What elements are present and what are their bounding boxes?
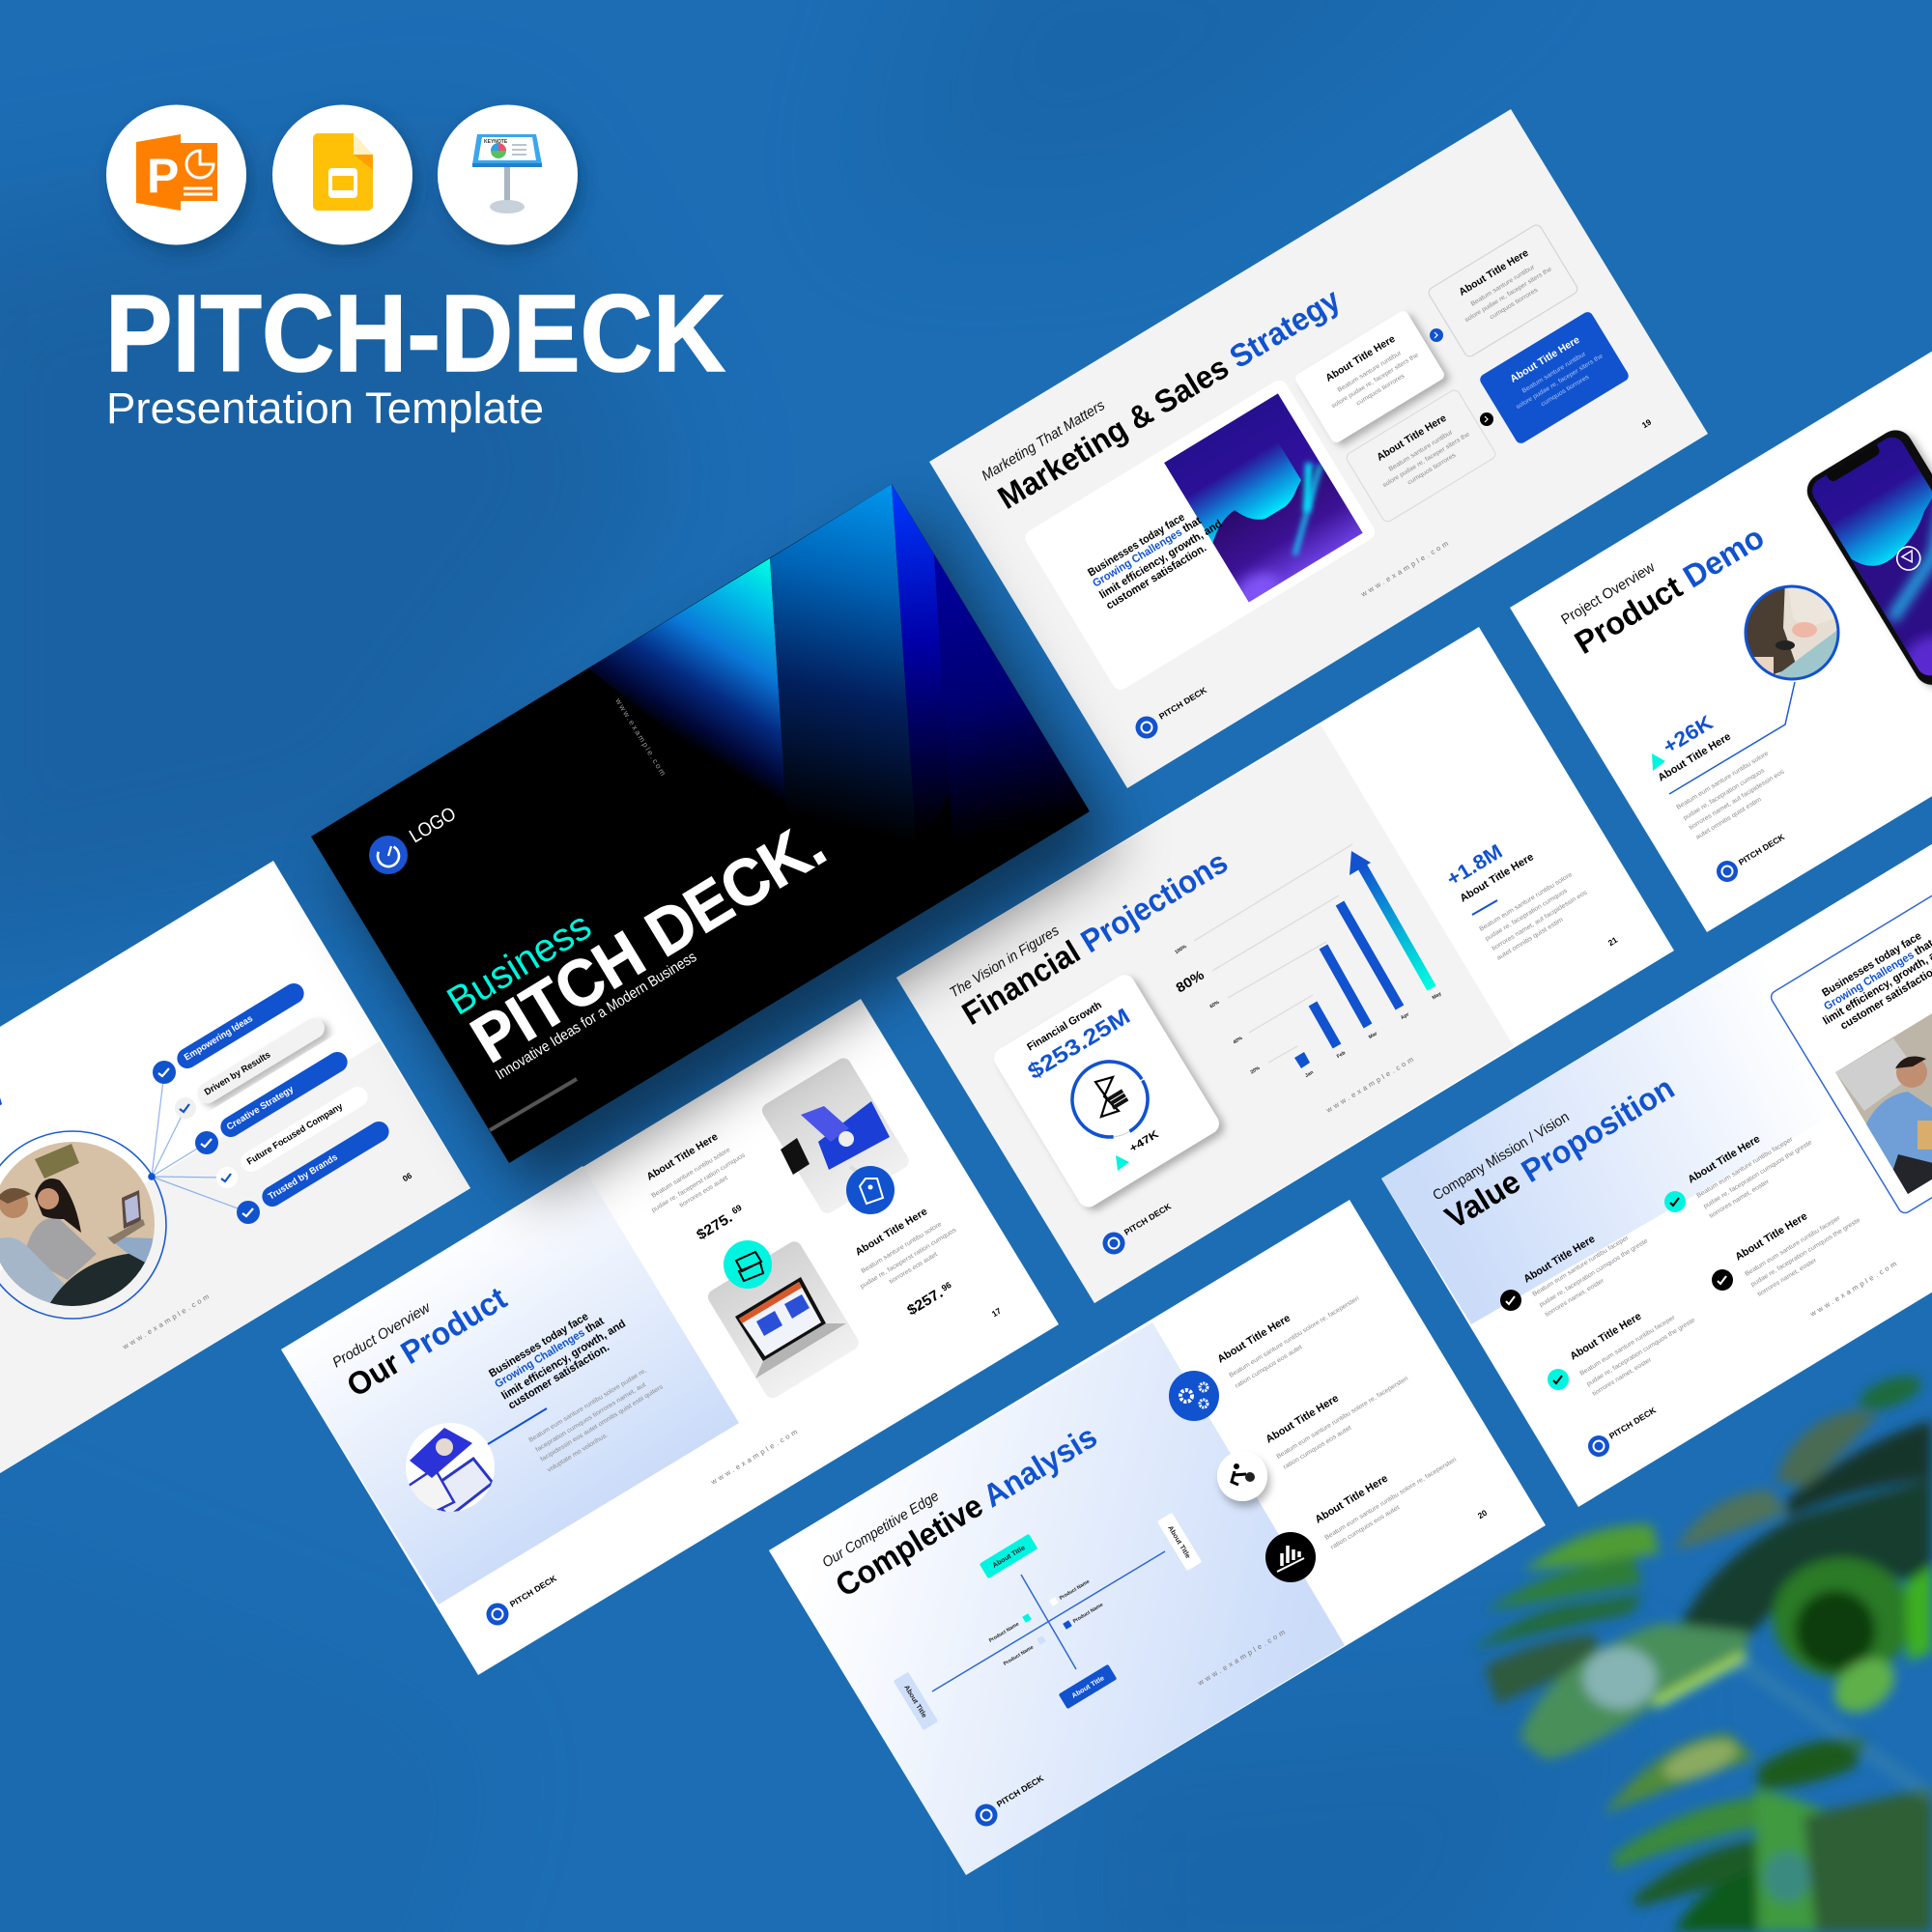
plant foreground [1471,1369,1932,1932]
icon: Keynote: KEYNOTE [484,139,508,145]
product 2 text: pudae re, faceperst ration cumquos [859,1227,958,1291]
item 4: About Title Here [1733,1210,1809,1264]
logo [1717,832,1787,882]
bar chart: Mar [1368,1031,1378,1040]
card: outlined upper: cumquos tiorrores [1489,286,1540,321]
pill: Driven by Results [193,1014,328,1107]
product 2 text: Beatum santure runtibu solore [860,1221,943,1275]
quadrant chart: Product Name [1003,1644,1035,1667]
card: outlined lower: cumquos tiorrores [1406,451,1458,486]
slide: cover [311,484,1090,1163]
slide: marketing and sales strategy [929,109,1708,788]
card: outlined upper: About Title Here [1457,247,1531,298]
pill: Trusted by Brands [258,1118,393,1210]
quadrant chart: Product Name [1059,1578,1091,1602]
subtitle: Presentation Template [106,384,544,433]
stat: +1.8M: +1.8M [1443,840,1506,891]
slide: our product [281,999,1059,1675]
stat: +26K: Beatum eum santure runtibu solore [1675,750,1770,811]
item 1: Beatum eum santure runtibu faceper [1531,1235,1631,1298]
heading: Marketing & Sales Strategy [991,281,1347,516]
bar chart: Feb [1336,1050,1347,1060]
slide: competitive analysis [769,1200,1546,1875]
product 1 text: Beatum santure runtibu solore [650,1147,732,1200]
logo: PITCH DECK [995,1773,1046,1809]
icon: bars [1265,1532,1316,1582]
icon: Keynote [438,104,578,245]
statement text: limit efficiency, growth, and [1097,518,1224,602]
tag: right: About Title [1166,1524,1191,1560]
growth card: Financial Growth [1025,999,1104,1054]
pill: Future Focused Company: Future Focused Company [245,1101,346,1168]
pill: Empowering Ideas [173,980,308,1072]
stat: +26K: About Title Here [1656,731,1733,784]
slide: competitive analysis: 20 [1476,1508,1489,1520]
image card: monitor mockup [759,1055,912,1216]
product 1 text: 69 [730,1203,744,1216]
card: outlined upper: solore pudae re, faceper siters the [1463,266,1553,324]
statement text: customer satisfaction. [1104,542,1208,612]
icon: PowerPoint [106,104,246,245]
icon: box [724,1240,772,1289]
card: outlined upper [1427,223,1579,358]
pill: Empowering Ideas: Empowering Ideas [183,1013,255,1064]
item 1: pudae re, facepration cumquos the greste [1538,1237,1649,1309]
logo [976,1773,1046,1826]
product 1 text: $275. [694,1209,735,1243]
statement text: customer satisfaction. [506,1342,611,1412]
bar chart: May [1432,991,1442,1001]
icon: Google Slides [272,104,412,245]
slide: left checklist [0,861,470,1540]
card: outlined lower: About Title Here [1375,412,1449,464]
quadrant chart: Product Name [988,1621,1020,1644]
outlined card with photo: Businesses today face [1820,930,1923,1000]
outlined card with photo [1770,895,1932,1213]
statement text: Growing Challenges that [1091,515,1204,590]
item 2: tiorrores namet, eoster [1591,1356,1654,1398]
item 3: Beatum eum santure runtibu solore re, facepersteri [1323,1456,1459,1542]
slide: financial projections: 21 [1606,935,1619,948]
item 1: About Title Here [1215,1313,1293,1366]
slide: financial projections: www.example.com [1324,1055,1415,1115]
check icons [153,1061,260,1224]
card: white: solore pudae re, faceper siters the [1330,352,1420,410]
cover slide shadow [337,518,1116,1197]
slide: marketing and sales strategy: www.example.com [1359,539,1450,599]
body text: Beatum eum santure runtibu solore pudae re, [527,1367,648,1444]
item 2: ration cumquos eos autet [1282,1425,1352,1471]
bar chart: Jan [1304,1069,1315,1079]
quadrant chart [894,1513,1202,1730]
item 2: About Title Here [1264,1393,1341,1446]
product 2 text: 96 [940,1280,953,1293]
body text: facepration cumquos tiorrores namet, aut [534,1381,647,1454]
pill: Future Focused Company [237,1083,372,1176]
tag: left [894,1672,938,1730]
product 1 text [644,1131,747,1243]
growth card: $253.25M [1023,1003,1134,1084]
quadrant chart: Product Name [1072,1602,1104,1625]
item 3: ration cumquos eos autet [1329,1504,1401,1551]
slide: our product: 17 [990,1306,1003,1319]
slide: product demo [1510,352,1932,932]
stat: +26K: pudae re, facepration cumquos [1682,767,1767,822]
item 1: About Title Here [1521,1234,1597,1286]
item 4: pudae re, facepration cumquos the greste [1749,1216,1861,1289]
slide: value proposition [1381,794,1932,1507]
statement text: Businesses today face [1086,512,1187,580]
slide: competitive analysis: www.example.com [1196,1628,1287,1688]
slide: left checklist: www.example.com [121,1293,211,1351]
item 4: tiorrores namet, eoster [1756,1257,1819,1298]
card: blue: cumquos tiorrores [1540,373,1591,408]
heading: Completive Analysis [829,1418,1103,1604]
logo [1588,1405,1659,1457]
product 2 text [853,1206,958,1319]
pill: Driven by Results: Driven by Results [203,1050,272,1098]
pill: Creative Strategy [216,1048,352,1141]
tag: left: About Title [902,1684,927,1719]
product 1 text: tiorrores eos autet [678,1175,729,1209]
item 1: Beatum eum santure runtibu solore re, facepersteri [1228,1294,1361,1379]
card: white [1293,309,1446,444]
pill: Trusted by Brands: Trusted by Brands [267,1152,340,1203]
item 2: About Title Here [1568,1311,1643,1363]
circular template preview [406,1423,495,1517]
growth card [990,971,1223,1210]
heading: Product Demo [1568,519,1770,661]
stat: +26K: +26K [1660,712,1717,758]
phone mockup [1806,429,1932,692]
logo: PITCH DECK [1737,832,1787,867]
card: white: Beatum santure runtibur [1336,350,1404,394]
icon: gears [1169,1371,1219,1421]
item 1: ration cumquos eos autet [1234,1344,1304,1390]
bar chart: 60% [1208,1000,1221,1009]
item 2: pudae re, facepration cumquos the greste [1585,1317,1696,1388]
arrow [1350,851,1432,988]
card: outlined lower [1345,388,1497,524]
card: blue [1478,310,1631,445]
icon: PowerPoint: P [147,149,179,203]
product 2 text: tiorrores eos autet [888,1251,939,1286]
stat: +1.8M [1443,840,1589,962]
card: outlined lower: solore pudae re, faceper siters the [1381,431,1471,489]
hub dot [148,1173,156,1180]
stat: +1.8M: About Title Here [1458,851,1536,905]
stat: +1.8M: pudae re, facepration cumquos [1484,887,1569,943]
item 3: Beatum eum santure runtibu faceper [1695,1136,1795,1200]
tag: bottom [1059,1664,1117,1709]
card: blue: Beatum santure runtibur [1520,351,1588,395]
tag: top: About Title [991,1545,1027,1570]
bar chart [1173,844,1442,1079]
slide: our product: www.example.com [709,1428,799,1487]
photo: couple with laptop [0,1130,166,1333]
item 4: Beatum eum santure runtibu faceper [1744,1214,1842,1278]
stat: +1.8M: autet omnitis quist estim [1495,916,1565,962]
logo: PITCH DECK [508,1573,559,1609]
body text [527,1367,665,1474]
item 4 [1712,1210,1861,1298]
item 1 [1500,1234,1649,1319]
heading: Value Proposition [1438,1069,1680,1236]
gradient wave image [1155,393,1368,616]
heading: Marketing That Matters [979,397,1108,484]
website text: www.example.com [613,696,668,778]
logo: PITCH DECK [1607,1405,1659,1441]
title: PITCH-DECK [105,272,725,394]
tag: bottom: About Title [1070,1675,1106,1700]
cover title: PITCH DECK. [459,808,838,1077]
item 3 [1664,1133,1813,1220]
stat: +1.8M: tiorrores namet, aut facipidessin eos [1491,889,1589,952]
item 2: Beatum eum santure runtibu faceper [1578,1314,1677,1378]
item 3: tiorrores namet, eoster [1708,1178,1771,1220]
image card: laptop mockup [705,1238,862,1401]
cover title: Business [440,903,599,1024]
growth card: +47K [1127,1128,1161,1155]
arrow dots [1430,328,1493,426]
connector lines [152,1072,248,1212]
bar chart: 40% [1232,1036,1244,1045]
tag: top [980,1534,1037,1578]
product 1 text: pudae re, faceperst ration cumquos [650,1151,747,1214]
item 3: About Title Here [1313,1473,1390,1526]
logo: LOGO [406,803,460,847]
logo [1136,685,1209,738]
cover title: Innovative Ideas for a Modern Business [493,949,699,1083]
heading: Financial Projections [955,843,1234,1032]
card: blue: solore pudae re, faceper siters the [1515,353,1605,411]
slide: marketing and sales strategy: 19 [1640,417,1653,430]
heading: Project Overview [1558,559,1658,628]
slide: financial projections [896,627,1674,1303]
body text: facipidessin eos autet omnitis quist estii quiters [539,1383,665,1463]
statement text: limit efficiency, growth, and [499,1318,628,1403]
card: white: cumquos tiorrores [1355,372,1406,407]
product 2 text: About Title Here [853,1206,929,1259]
body text: voluptate mo volorihus. [546,1432,610,1474]
stat: +26K: tiorrores namet, aut facipidessin eos [1688,768,1786,832]
logo: PITCH DECK [1122,1201,1174,1237]
heading: The Vision in Figures [947,923,1063,1001]
item 1: tiorrores namet, eoster [1544,1277,1606,1319]
item 3: About Title Here [1686,1133,1762,1186]
photo: hand on tablet [1745,585,1839,680]
bar chart: 100% [1174,944,1188,955]
card: blue: About Title Here [1508,334,1582,385]
icon: tag [846,1166,895,1214]
statement text: Growing Challenges that [493,1316,607,1391]
bar chart: 80% [1173,966,1208,996]
heading: Our Competitive Edge [819,1488,942,1571]
product 1 text: About Title Here [644,1131,720,1183]
photo: man in blue shirt [1835,1013,1932,1194]
stat: +26K: autet omnitis quist estim [1694,796,1763,841]
card: outlined lower: Beatum santure runtibur [1387,429,1455,473]
gradient beams [588,484,1090,894]
logo [369,803,460,874]
card: white: About Title Here [1323,333,1398,384]
logo [1103,1201,1174,1254]
bar chart: 20% [1249,1065,1262,1075]
logo [487,1573,559,1625]
logo icons row [106,104,578,245]
icon: person with ball [1217,1451,1267,1501]
donut [1059,1048,1161,1151]
slide: value proposition: www.example.com [1808,1260,1898,1319]
tag: right [1157,1513,1202,1571]
heading: Product Overview [329,1299,434,1371]
large white card [1022,377,1378,693]
pill: Creative Strategy: Creative Strategy [225,1084,297,1133]
statement text: Businesses today face [487,1311,590,1380]
connector [1669,682,1795,794]
item 2 [1548,1311,1696,1398]
heading: Company Mission / Vision [1430,1109,1573,1204]
stat: +1.8M: Beatum eum santure runtibu solore [1478,871,1574,933]
card: outlined upper: Beatum santure runtibur [1469,264,1537,308]
item 2: Beatum eum santure runtibu solore re, facepersteri [1275,1375,1410,1461]
heading: Our Product [340,1280,513,1404]
slide: left checklist: 06 [401,1171,413,1183]
bar chart: Apr [1400,1011,1410,1021]
item 3: pudae re, facepration cumquos the greste [1702,1139,1813,1210]
logo: PITCH DECK [1157,685,1209,722]
stat: +26K [1652,712,1786,841]
product 2 text: $257. [904,1285,946,1319]
